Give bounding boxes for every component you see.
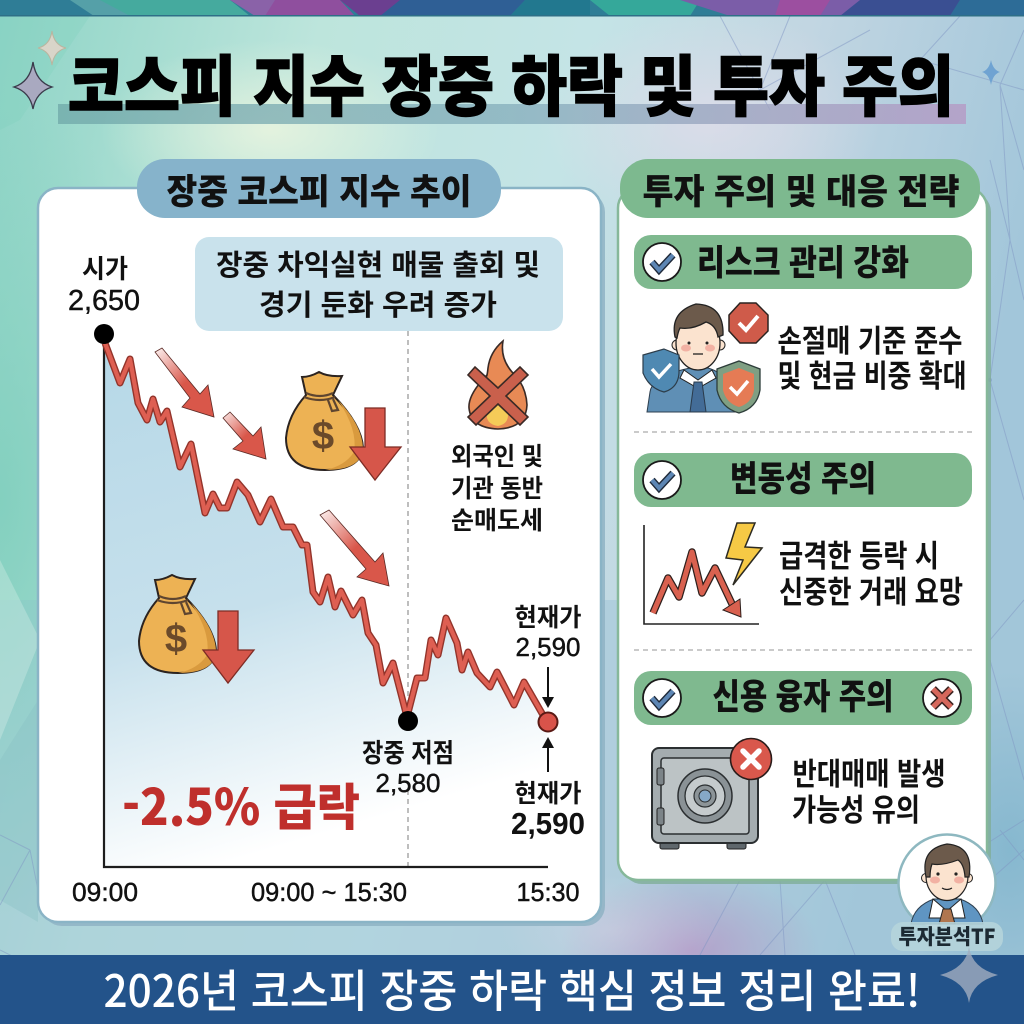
label: intraday low: 2,580 [376, 768, 440, 798]
footer banner: 2026년 코스피 장중 하락 핵심 정보 정리 완료! [104, 955, 920, 1020]
section header: volatility [634, 451, 972, 507]
text: volatility [779, 531, 963, 612]
icon: money bag with down arrow [286, 372, 401, 480]
panel heading: strategy: 투자 주의 및 대응 전략 [642, 164, 960, 215]
label: current price, upper [514, 598, 582, 662]
title: 코스피 지수 장중 하락 및 투자 주의 [68, 34, 954, 130]
label: intraday low: 장중 저점 [362, 733, 454, 770]
line chart [94, 324, 558, 867]
callout: sell-off reason [195, 237, 563, 331]
label: analyst name: 투자분석TF [898, 921, 996, 951]
icon: money bag with down arrow: $ [312, 414, 334, 458]
icon: crossed-out fire [468, 341, 528, 429]
text: foreign and institutional selling [451, 437, 543, 537]
section: credit loan [634, 669, 972, 849]
label: current price, upper: 현재가 [514, 598, 582, 634]
axis labels: 09:00 ~ 15:30 [251, 877, 407, 907]
icon: safe with X badge [652, 738, 772, 849]
callout: sell-off reason: 장중 차익실현 매물 출회 및 [216, 242, 540, 284]
axis labels [72, 877, 580, 907]
text: credit loan: 가능성 유의 [792, 785, 920, 830]
section header: credit loan [634, 669, 972, 725]
section header: risk management: 리스크 관리 강화 [697, 235, 909, 286]
sparkle icons [14, 31, 1000, 109]
text: foreign and institutional selling: 기관 동반 [451, 469, 543, 505]
text: volatility: 급격한 등락 시 [779, 531, 939, 576]
arrow: up to current price [542, 737, 554, 772]
text: foreign and institutional selling: 외국인 및 [451, 437, 543, 473]
text: volatility: 신중한 거래 요망 [779, 567, 963, 612]
arrows: downward trend [155, 348, 389, 586]
top decorative band [0, 0, 1024, 16]
label: open price [68, 249, 140, 317]
section header: risk management [634, 235, 972, 289]
arrow: down to current price [542, 667, 554, 708]
panel heading: chart: 장중 코스피 지수 추이 [166, 164, 472, 215]
icon: analyst avatar [898, 834, 996, 932]
icon: worried investor with shields [643, 303, 768, 413]
section header: volatility: 변동성 주의 [730, 451, 876, 502]
text: risk management: 손절매 기준 준수 [778, 316, 962, 361]
axis labels: 15:30 [516, 877, 580, 907]
panel: investment caution strategy [618, 159, 991, 884]
text: risk management: 및 현금 비중 확대 [778, 351, 966, 396]
label: current price, upper: 2,590 [516, 632, 580, 662]
label: open price: 2,650 [68, 285, 140, 317]
section header: credit loan: 신용 융자 주의 [712, 669, 894, 720]
section: volatility [634, 451, 972, 624]
text: credit loan: 반대매매 발생 [792, 749, 946, 794]
label: current price, lower [511, 774, 585, 841]
callout: sell-off reason: 경기 둔화 우려 증가 [259, 282, 497, 324]
label: intraday low [362, 733, 454, 798]
icon: volatile chart with lightning [644, 523, 762, 624]
label: current price, lower: 현재가 [514, 774, 582, 810]
text: risk management [778, 316, 966, 396]
icon: footer sparkle [940, 947, 998, 1003]
label: current price, lower: 2,590 [511, 806, 585, 841]
section: risk management [634, 235, 972, 413]
callout: decline percentage: -2.5% 급락 [122, 768, 360, 840]
icon: money bag with down arrow, lower [139, 575, 254, 683]
icon: money bag with down arrow, lower: $ [165, 617, 187, 661]
axis labels: 09:00 [72, 877, 138, 907]
label: open price: 시가 [82, 249, 128, 286]
panel: KOSPI intraday chart [38, 159, 605, 926]
text: credit loan [792, 749, 946, 830]
text: foreign and institutional selling: 순매도세 [451, 501, 543, 537]
